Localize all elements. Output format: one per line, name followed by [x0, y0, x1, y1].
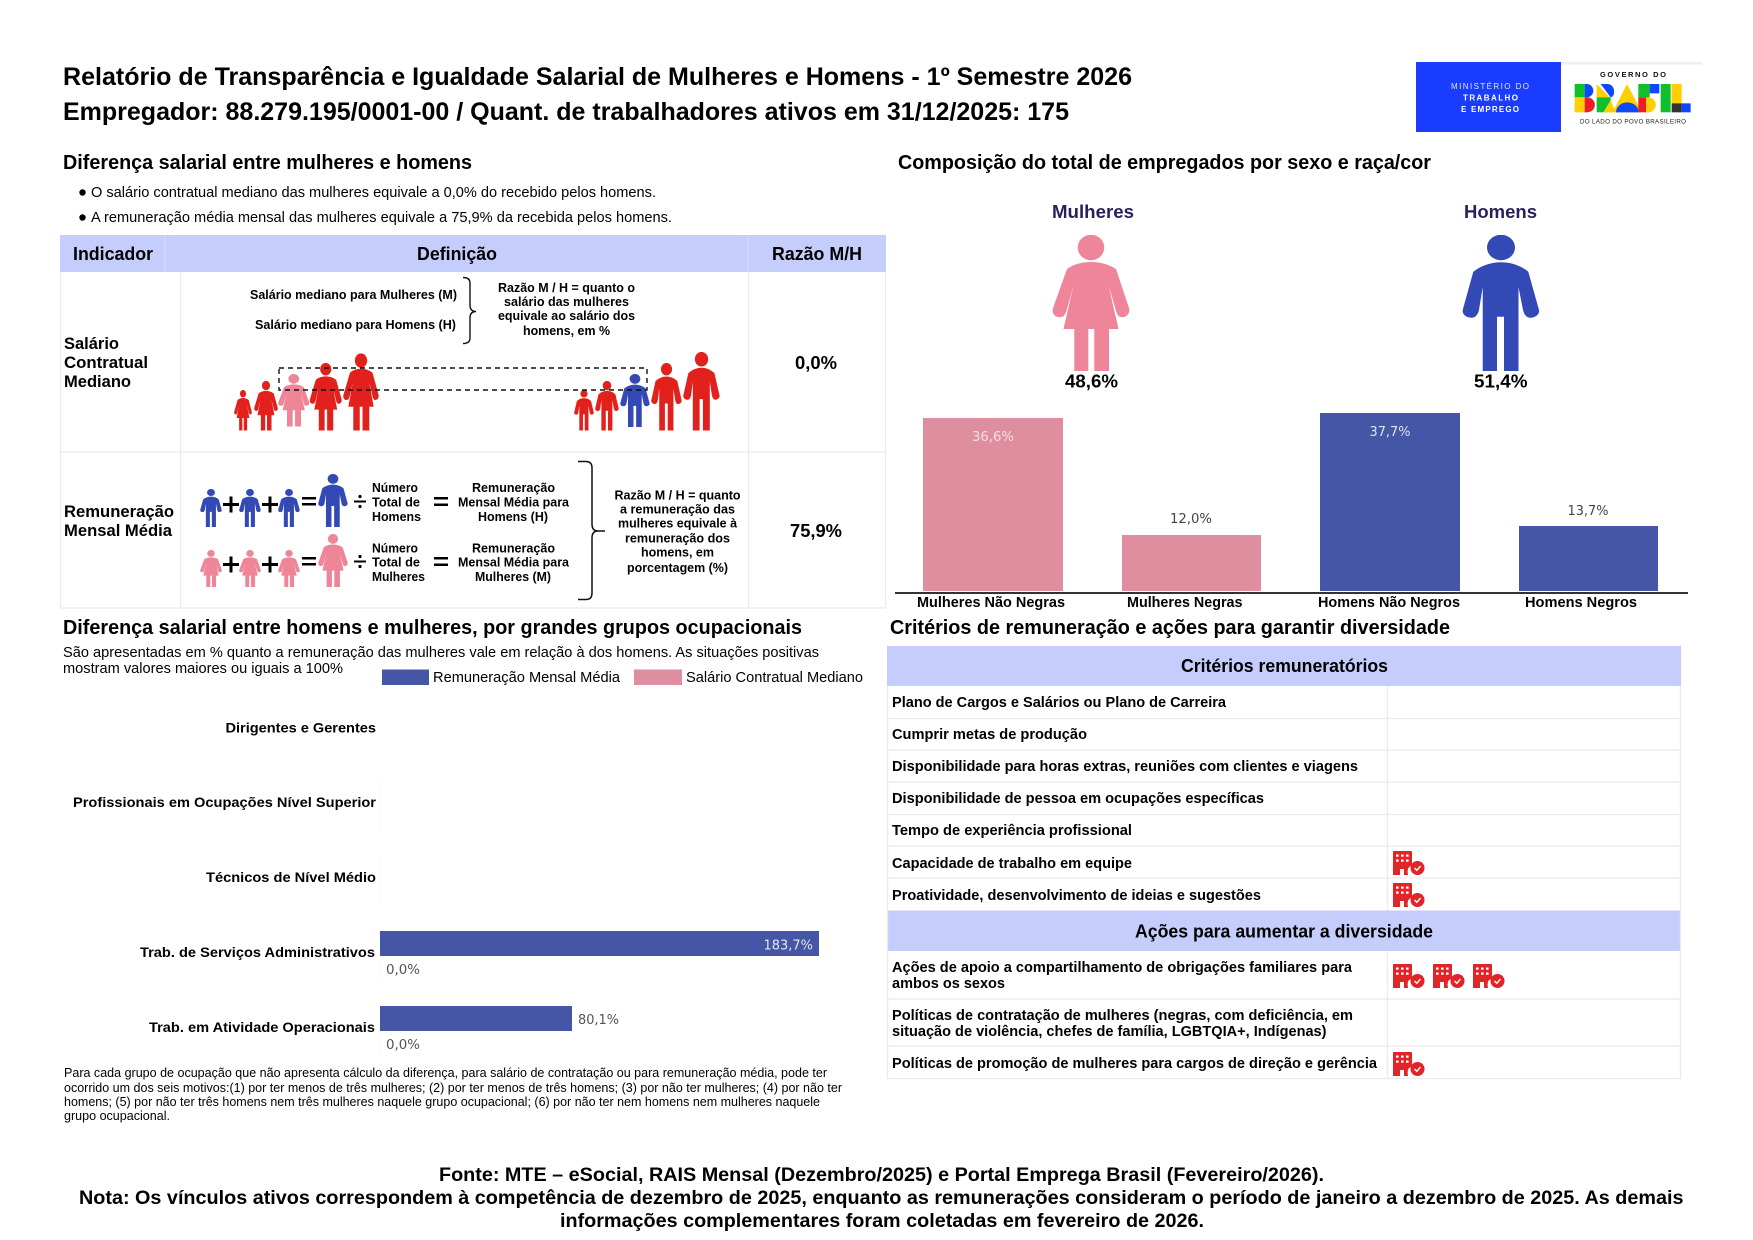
formula: women average: Mulheres	[372, 570, 425, 584]
logo: ministry blue block: TRABALHO	[1463, 94, 1518, 103]
criteria rows: Capacidade de trabalho em equipe	[892, 856, 1132, 872]
row label: remuneração mensal média: Mensal Média	[64, 522, 173, 540]
definition: razão M/H remuneration text: mulheres equivale à	[618, 516, 737, 530]
heading: composição: Composição do total de empregados por sexo e raça/cor	[898, 152, 1431, 174]
value: men share: 51,4%	[1474, 372, 1528, 392]
heading: critérios: Critérios de remuneração e ações para garantir diversidade	[890, 617, 1450, 639]
table header labels: Indicador	[73, 244, 153, 264]
text block: footnote on missing data: grupo ocupacional.	[64, 1109, 170, 1123]
heading: diferença salarial: Diferença salarial entre mulheres e homens	[63, 152, 472, 174]
action rows	[892, 960, 1378, 1072]
text block: footnote on missing data: homens; (5) por não ter três homens nem três mulheres naquele grupo ocupacional; (6) por não ter nem homens nem mulheres naquele	[64, 1095, 820, 1109]
logo: Ministério do Trabalho e Emprego / Governo do Brasil	[1416, 62, 1702, 132]
panel: indicator definition table	[60, 235, 886, 608]
panel: criteria and actions table	[887, 646, 1681, 1078]
category labels: Trab. em Atividade Operacionais	[149, 1019, 375, 1035]
icons: company check marks	[1393, 851, 1504, 1076]
logo: Ministério do Trabalho e Emprego / Governo do Brasil: GOVERNO DO	[1600, 70, 1666, 79]
value: razão remuneração média: 75,9%	[790, 521, 842, 541]
text block: chart description	[63, 645, 819, 677]
bullet text block	[79, 184, 672, 226]
formula: women average: Remuneração	[472, 542, 555, 556]
icon: woman	[1053, 235, 1129, 371]
logo: Ministério do Trabalho e Emprego / Governo do Brasil: DO LADO DO POVO BRASILEIRO	[1580, 119, 1686, 126]
formula: women average: Total de	[372, 556, 420, 570]
criteria rows: Proatividade, desenvolvimento de ideias e sugestões	[892, 888, 1261, 904]
row label: salário contratual mediano: Contratual	[64, 354, 148, 372]
data labels	[386, 938, 813, 1053]
data labels: 80,1%	[578, 1012, 619, 1028]
brace: average remuneration	[578, 462, 605, 600]
row label: remuneração mensal média: Remuneração	[64, 503, 174, 521]
text block: chart description: mostram valores maiores ou iguais a 100%	[63, 661, 343, 677]
definition: median salary labels: Salário mediano para Homens (H)	[255, 318, 456, 332]
definition: median salary labels	[250, 288, 457, 332]
definition: razão M/H remuneration text	[614, 488, 741, 575]
row label: salário contratual mediano: Salário	[64, 335, 119, 353]
section title: critérios remuneratórios: Critérios remuneratórios	[1181, 656, 1388, 676]
bar chart: composition by sex and race: 37,7%	[1370, 424, 1411, 440]
definition: razão M/H salary text: salário das mulheres	[504, 295, 629, 309]
value: women share: 48,6%	[1065, 372, 1118, 392]
category labels	[73, 720, 377, 1035]
category labels: Dirigentes e Gerentes	[226, 720, 376, 736]
definition: razão M/H remuneration text: homens, em	[641, 546, 714, 560]
formula: women average	[200, 534, 570, 587]
text block: chart description: São apresentadas em % quanto a remuneração das mulheres vale em relação à dos homens. As situações positivas	[63, 645, 819, 661]
bars	[380, 931, 819, 956]
formula: men average	[200, 474, 570, 527]
table header labels	[73, 244, 862, 264]
criteria rows	[892, 695, 1358, 904]
text block: footnote on missing data: ocorrido um dos seis motivos:(1) por ter menos de três mulheres; (2) por ter menos de três homens; (3) por não ter mulheres; (4) por não ter	[64, 1081, 842, 1095]
criteria rows: Plano de Cargos e Salários ou Plano de Carreira	[892, 695, 1227, 711]
footer: source and note: Nota: Os vínculos ativos correspondem à competência de dezembro de 2025, enquanto as remunerações consideram o período de janeiro a dezembro de 2025. As demais	[79, 1187, 1684, 1209]
criteria rows: Disponibilidade de pessoa em ocupações específicas	[892, 791, 1264, 807]
logo: ministry blue block: E EMPREGO	[1461, 105, 1519, 114]
footer: source and note: Fonte: MTE – eSocial, RAIS Mensal (Dezembro/2025) e Portal Emprega Brasil (Fevereiro/2026).	[439, 1164, 1324, 1186]
action rows: Políticas de contratação de mulheres (negras, com deficiência, em	[892, 1008, 1353, 1024]
bar chart: composition by sex and race: Homens Não Negros	[1318, 595, 1460, 611]
legend: Salário Contratual Mediano	[686, 669, 863, 686]
definition: razão M/H salary text	[498, 281, 635, 338]
action rows: Políticas de promoção de mulheres para cargos de direção e gerência	[892, 1056, 1378, 1072]
title: Empregador: 88.279.195/0001-00 / Quant. de trabalhadores ativos em 31/12/2025: 175	[63, 98, 1069, 126]
formula: men average: Total de	[372, 496, 420, 510]
icon: man	[1463, 235, 1539, 371]
dashed comparison box	[279, 368, 647, 390]
formula: men average: Homens	[372, 510, 421, 524]
formula: women average: Mulheres (M)	[475, 570, 551, 584]
bar chart: composition by sex and race: Mulheres Negras	[1127, 595, 1242, 611]
legend: Remuneração Mensal Média	[433, 669, 621, 686]
action rows: ambos os sexos	[892, 976, 1005, 992]
definition: razão M/H remuneration text: remuneração dos	[625, 532, 730, 546]
label: Mulheres: Mulheres	[1052, 202, 1134, 222]
icon group: women ordered by salary	[234, 353, 379, 430]
title: Relatório de Transparência e Igualdade Salarial de Mulheres e Homens - 1º Semestre 2026	[63, 63, 1132, 91]
heading: diferença por grupos ocupacionais: Diferença salarial entre homens e mulheres, por grandes grupos ocupacionais	[63, 617, 802, 639]
footer: source and note: informações complementares foram coletadas em fevereiro de 2026.	[560, 1210, 1204, 1232]
definition: razão M/H salary text: homens, em %	[523, 324, 610, 338]
logo: ministry blue block: MINISTÉRIO DO	[1451, 82, 1529, 91]
brace: median salary	[463, 278, 476, 344]
legend	[382, 669, 863, 686]
definition: razão M/H salary text: Razão M / H = quanto o	[498, 281, 635, 295]
bar chart: composition by sex and race: Homens Negros	[1525, 595, 1637, 611]
formula: men average: Mensal Média para	[458, 496, 570, 510]
category labels: Técnicos de Nível Médio	[206, 869, 376, 885]
title	[63, 63, 1132, 126]
label: Homens: Homens	[1464, 202, 1537, 222]
bullet text block: A remuneração média mensal das mulheres equivale a 75,9% da recebida pelos homens.	[91, 209, 672, 226]
bar chart: composition by sex and race	[895, 413, 1688, 611]
text block: footnote on missing data: Para cada grupo de ocupação que não apresenta cálculo da diferença, para salário de contratação ou para remuneração média, pode ter	[64, 1066, 827, 1080]
action rows: Ações de apoio a compartilhamento de obrigações familiares para	[892, 960, 1353, 976]
data labels: 0,0%	[386, 962, 420, 978]
criteria rows: Cumprir metas de produção	[892, 727, 1087, 743]
section title: ações: Ações para aumentar a diversidade	[1135, 922, 1433, 942]
row label: salário contratual mediano: Mediano	[64, 373, 131, 391]
table header labels: Razão M/H	[772, 244, 862, 264]
formula: men average: Remuneração	[472, 481, 555, 495]
definition: razão M/H salary text: equivale ao salário dos	[498, 309, 635, 323]
bar chart: composition by sex and race: 12,0%	[1170, 511, 1212, 527]
formula: women average: Mensal Média para	[458, 556, 570, 570]
bar chart: occupational groups	[73, 720, 819, 1055]
definition: razão M/H remuneration text: porcentagem (%)	[627, 561, 728, 575]
action rows: situação de violência, chefes de família, LGBTQIA+, Indígenas)	[892, 1024, 1327, 1040]
logo: ministry blue block	[1416, 62, 1561, 132]
row label: salário contratual mediano	[64, 335, 148, 391]
formula: men average: Homens (H)	[478, 510, 548, 524]
category labels: Profissionais em Ocupações Nível Superior	[73, 794, 377, 810]
bar chart: composition by sex and race: 13,7%	[1568, 503, 1609, 519]
bar chart: composition by sex and race: 36,6%	[972, 429, 1014, 445]
icon group: men ordered by salary	[574, 352, 720, 430]
criteria rows: Disponibilidade para horas extras, reuniões com clientes e viagens	[892, 759, 1358, 775]
formula: men average: Número	[372, 481, 418, 495]
criteria rows: Tempo de experiência profissional	[892, 823, 1132, 839]
formula: women average: Número	[372, 542, 418, 556]
row label: remuneração mensal média	[64, 503, 174, 540]
definition: razão M/H remuneration text: a remuneração das	[620, 502, 735, 516]
footer: source and note	[79, 1164, 1684, 1232]
definition: razão M/H remuneration text: Razão M / H = quanto	[614, 488, 741, 502]
text block: footnote on missing data	[64, 1066, 842, 1123]
bullet text block: O salário contratual mediano das mulheres equivale a 0,0% do recebido pelos homens.	[91, 184, 656, 201]
category labels: Trab. de Serviços Administrativos	[140, 944, 375, 960]
table header labels: Definição	[417, 244, 497, 264]
data labels: 0,0%	[386, 1037, 420, 1053]
value: razão salário contratual: 0,0%	[795, 353, 837, 373]
definition: median salary labels: Salário mediano para Mulheres (M)	[250, 288, 457, 302]
data labels: 183,7%	[764, 938, 813, 954]
logo: colourful Brasil wordmark	[1575, 84, 1691, 112]
bar chart: composition by sex and race: Mulheres Não Negras	[917, 595, 1065, 611]
